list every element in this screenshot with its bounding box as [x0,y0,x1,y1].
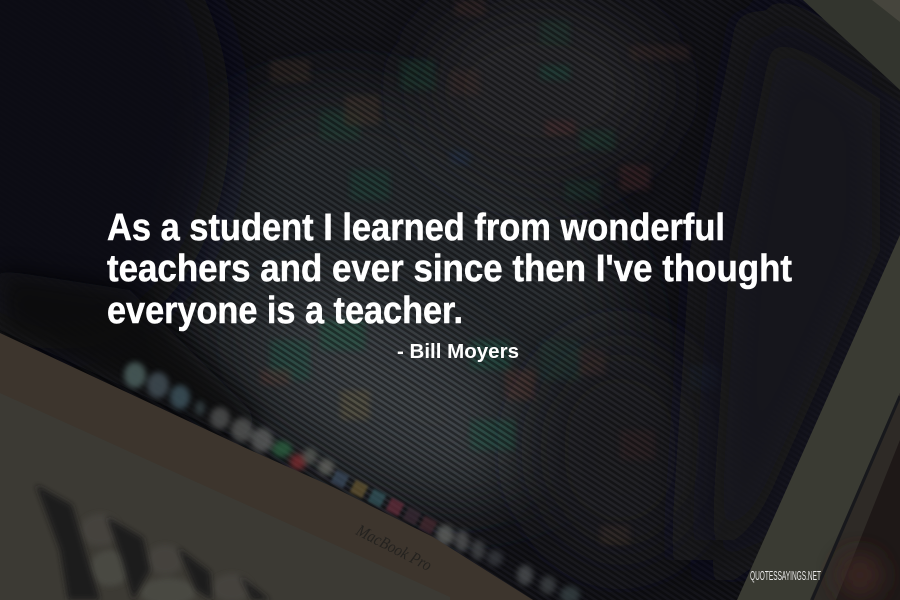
attribution: - Bill Moyers [397,341,519,363]
quote text: everyone is a teacher. [107,290,463,332]
code text lines texture [168,0,820,600]
right bezel: grey strip [737,235,900,600]
laptop bezel: brown strip [0,333,533,600]
watermark: QUOTESSAYINGS.NET [750,568,821,583]
laptop palm rest [0,393,450,600]
MacBook Pro label: MacBook Pro [352,520,435,575]
left dark vignette [0,0,260,440]
top right bezel [803,0,900,90]
right bezel: outer edge [810,393,900,600]
right dark screen edge [690,0,900,560]
quote text [107,207,792,332]
dock icons on screen [124,362,580,600]
screen glow: code area [174,0,675,545]
keyboard keys [36,485,270,600]
code colour patches [260,0,720,545]
quote text: As a student I learned from wonderful [107,207,725,249]
quote text: teachers and ever since then I've thought [107,248,792,290]
